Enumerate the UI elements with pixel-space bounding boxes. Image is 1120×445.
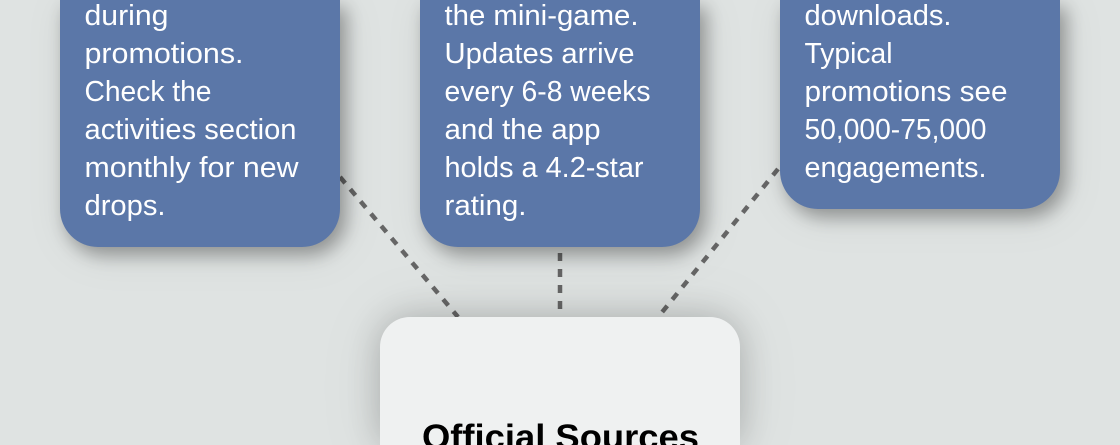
panel: right card: [780, 0, 1060, 209]
text block: right card: promotions see: [804, 76, 1008, 108]
panel: left card: [60, 0, 340, 247]
text block: left card: drops.: [84, 190, 166, 222]
text block: right card: downloads.: [804, 0, 952, 32]
panel: Official Sources hub: [380, 317, 740, 445]
text block: left card: during: [84, 0, 168, 32]
text block: left card: promotions.: [84, 38, 244, 70]
text block: middle card: and the app: [444, 114, 600, 146]
text block: middle card: Updates arrive: [444, 38, 634, 70]
text block: middle card: [444, 0, 650, 222]
connector: right card to hub: [659, 169, 778, 316]
text block: right card: 50,000-75,000: [804, 114, 986, 146]
text block: right card: [804, 0, 1008, 184]
text block: middle card: the mini-game.: [444, 0, 638, 32]
text block: left card: monthly for new: [84, 152, 299, 184]
text block: right card: Typical: [804, 38, 892, 70]
text block: middle card: every 6-8 weeks: [444, 76, 650, 108]
connector: left card to hub: [340, 177, 458, 317]
connector: middle card to hub: [558, 253, 562, 310]
panel: middle card: [420, 0, 700, 247]
text block: left card: Check the: [84, 76, 212, 108]
text block: left card: activities section: [84, 114, 296, 146]
text block: left card: [84, 0, 299, 222]
text block: middle card: holds a 4.2-star: [444, 152, 644, 184]
text block: right card: engagements.: [804, 152, 986, 184]
text block: middle card: rating.: [444, 190, 526, 222]
